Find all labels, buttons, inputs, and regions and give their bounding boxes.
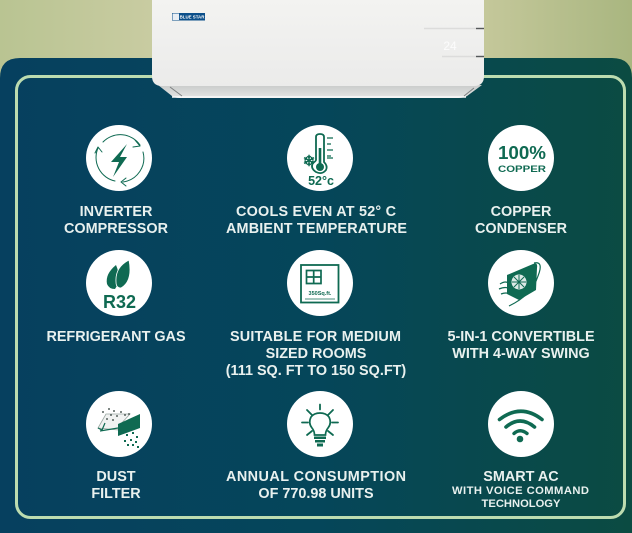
label: [475, 204, 568, 237]
label: TECHNOLOGY: [482, 498, 561, 510]
label: [447, 329, 595, 362]
feature: cools at 52 C: [226, 125, 407, 237]
label: INVERTER: [80, 204, 153, 220]
label: OF 770.98 UNITS: [258, 486, 374, 502]
feature: dust filter: [86, 391, 152, 502]
icon: wifi: [488, 391, 554, 457]
icon: thermometer: ❄: [303, 153, 315, 170]
label: CONDENSER: [475, 221, 568, 237]
icon: 100% copper: 100%: [498, 143, 546, 163]
feature: copper condenser: [475, 125, 568, 237]
label: SUITABLE FOR MEDIUM: [230, 329, 401, 345]
label: [64, 204, 169, 237]
icon: thermometer: [287, 125, 353, 191]
label: COPPER: [491, 204, 552, 220]
icon: room plan: [287, 250, 353, 316]
label: COMPRESSOR: [64, 221, 169, 237]
label: 5-IN-1 CONVERTIBLE: [447, 329, 595, 345]
label: WITH VOICE COMMAND: [452, 485, 589, 497]
air conditioner unit: [152, 0, 484, 98]
brand logo: BLUE STAR: [180, 15, 205, 20]
feature: convertible swing: [447, 250, 595, 362]
label: [226, 204, 407, 237]
display and vents: [424, 28, 484, 56]
icon: fan swing: [488, 250, 554, 316]
label: DUST: [96, 469, 136, 485]
feature: inverter compressor: [64, 125, 169, 237]
icon: light bulb: [287, 391, 353, 457]
label: (111 SQ. FT TO 150 SQ.FT): [226, 363, 406, 379]
label: AMBIENT TEMPERATURE: [226, 221, 407, 237]
feature: medium rooms: [226, 250, 406, 379]
label: [226, 329, 406, 379]
label: FILTER: [91, 486, 141, 502]
label: REFRIGERANT GAS: [46, 329, 186, 345]
label: [91, 469, 141, 502]
label: SMART AC: [483, 469, 559, 485]
label: SIZED ROOMS: [266, 346, 367, 362]
panel: inner rounded border: [16, 76, 624, 518]
feature: smart AC: [452, 391, 589, 510]
brand logo: [172, 13, 205, 20]
icon: inverter bolt: [86, 125, 152, 191]
label: WITH 4-WAY SWING: [452, 346, 590, 362]
label: [226, 469, 406, 502]
icon: 100% copper: [488, 125, 554, 191]
icon: 100% copper: COPPER: [498, 164, 546, 175]
feature: annual consumption: [226, 391, 406, 502]
icon: R32 leaves: R32: [103, 292, 136, 312]
label: [452, 469, 589, 510]
label: COOLS EVEN AT 52° C: [236, 204, 396, 220]
icon: room plan: 350Sq.ft.: [309, 291, 332, 297]
feature: refrigerant gas: [46, 250, 186, 345]
icon: filter with particles: [86, 391, 152, 457]
label: ANNUAL CONSUMPTION: [226, 469, 406, 485]
icon: thermometer: 52°c: [308, 174, 334, 188]
display and vents: 24: [443, 39, 457, 53]
